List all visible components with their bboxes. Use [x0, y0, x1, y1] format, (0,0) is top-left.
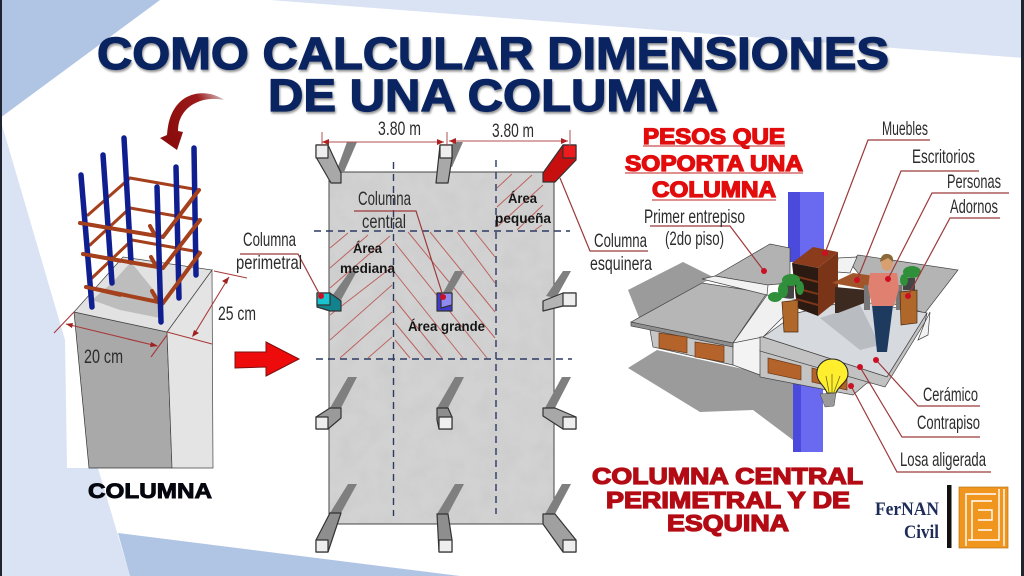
panel: floor section with loads: [628, 118, 1009, 472]
load labels: Primer entrepiso: [644, 206, 745, 228]
dimensions 3.80 m: [322, 118, 570, 146]
label: 20 cm: 20 cm: [84, 346, 123, 368]
dimensions 3.80 m: 3.80 m: [492, 120, 534, 142]
area labels: Área grande: [408, 319, 485, 334]
load labels: Muebles: [882, 118, 928, 140]
rebar cage: [80, 138, 200, 322]
cast shadows: [628, 262, 793, 440]
leader lines: [650, 140, 1009, 472]
blue column: [788, 192, 824, 452]
label: columna perimetral: Columna: [243, 229, 296, 251]
title: [97, 28, 889, 121]
shelf: [792, 247, 838, 316]
label: columna perimetral: perimetral: [236, 252, 302, 274]
person: [864, 254, 902, 352]
label: columna esquinera: [560, 178, 652, 275]
area labels: mediana: [340, 261, 395, 276]
label: columna esquinera: esquinera: [590, 253, 652, 275]
column shadows: [330, 142, 571, 514]
label: columna central: [354, 188, 446, 300]
title: COMO CALCULAR DIMENSIONES: [97, 28, 889, 79]
title: DE UNA COLUMNA: [268, 70, 718, 121]
label: columna perimetral: [236, 229, 324, 299]
heading: columna central perimetral y de esquina: PERIMETRAL Y DE: [606, 487, 850, 513]
logo: FerNAN Civil: [875, 485, 1008, 548]
area labels: pequeña: [495, 211, 551, 226]
load labels: Contrapiso: [917, 412, 980, 434]
hatched areas: [330, 174, 543, 358]
heading: columna central perimetral y de esquina: COLUMNA CENTRAL: [592, 463, 863, 489]
load labels: [644, 118, 1001, 471]
hollow bricks: [659, 333, 847, 390]
load labels: Escritorios: [912, 146, 975, 168]
columns: [316, 145, 576, 552]
icon: light bulb: [817, 359, 848, 407]
label: 25 cm: 25 cm: [218, 303, 256, 325]
logo: FerNAN Civil: FerNAN: [875, 499, 939, 520]
panel: column with rebar: [54, 93, 256, 503]
dimensions 3.80 m: 3.80 m: [378, 118, 421, 140]
dashed grid: [314, 160, 572, 516]
caption: COLUMNA: COLUMNA: [88, 480, 212, 503]
load labels: Cerámico: [923, 384, 978, 406]
panel: floor plan: [236, 118, 652, 552]
curved arrow: [160, 93, 224, 150]
heading: columna central perimetral y de esquina: [592, 463, 863, 536]
left planter: [768, 274, 804, 332]
label: columna central: Columna: [358, 188, 411, 210]
desk: [832, 273, 883, 313]
area labels: Área: [508, 191, 537, 206]
heading: columna central perimetral y de esquina: ESQUINA: [667, 510, 789, 536]
heading: pesos que soporta una columna: [625, 124, 803, 202]
heading: pesos que soporta una columna: PESOS QUE: [643, 124, 785, 149]
load labels: (2do piso): [665, 228, 724, 250]
dimension lines: [54, 271, 247, 357]
load labels: Adornos: [950, 196, 998, 218]
area labels: [340, 191, 551, 334]
label: columna central: central: [362, 211, 406, 233]
heading: pesos que soporta una columna: COLUMNA: [652, 177, 776, 202]
arrow: red to plan: [235, 342, 299, 376]
area labels: Área: [353, 241, 382, 256]
heading: pesos que soporta una columna: SOPORTA UNA: [625, 151, 803, 176]
label: columna esquinera: Columna: [594, 230, 647, 252]
slab: [329, 172, 554, 524]
logo: FerNAN Civil: Civil: [904, 522, 939, 543]
concrete column: [67, 257, 213, 468]
slabs and beams: [631, 244, 958, 395]
right planter: [900, 266, 921, 325]
